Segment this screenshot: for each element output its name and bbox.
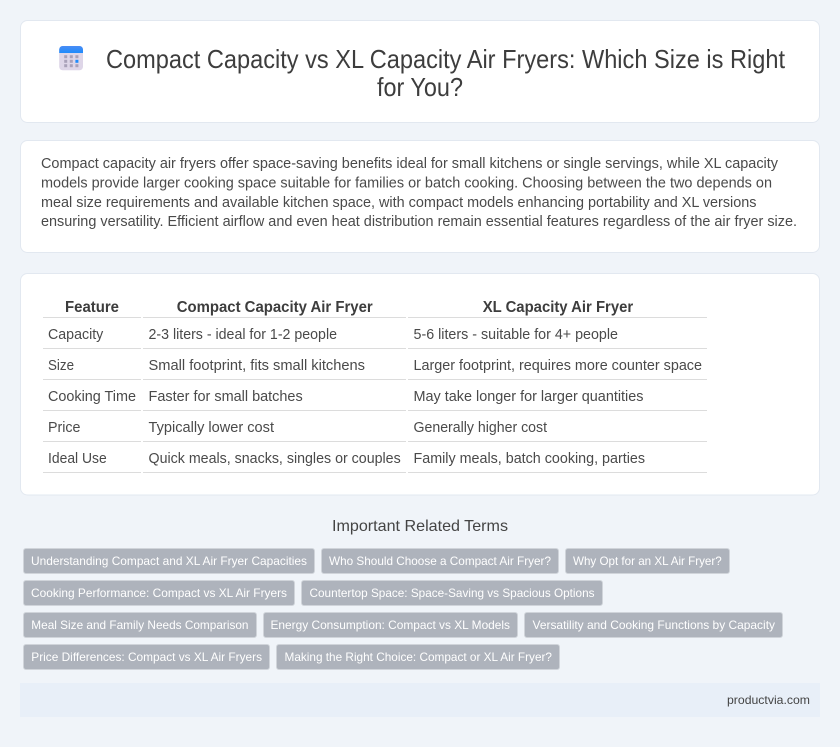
title: for You? <box>377 74 463 102</box>
row: capacity: 2-3 liters - ideal for 1-2 people <box>148 327 337 343</box>
tag <box>276 644 560 670</box>
tag: Who Should Choose a Compact Air Fryer? <box>329 554 551 568</box>
tag <box>264 612 518 638</box>
tag: Energy Consumption: Compact vs XL Models <box>270 618 510 632</box>
tag: Making the Right Choice: Compact or XL Air Fryer? <box>284 650 552 664</box>
tag <box>322 548 558 574</box>
row: ideal use: Family meals, batch cooking, parties <box>414 451 645 467</box>
tag <box>24 612 256 638</box>
tag: Countertop Space: Space-Saving vs Spacious Options <box>310 586 594 600</box>
row: size: Small footprint, fits small kitchens <box>148 358 365 374</box>
row: cooking time: Cooking Time <box>48 389 136 405</box>
table header <box>65 299 633 316</box>
tag: Versatility and Cooking Functions by Capacity <box>532 618 775 632</box>
footer <box>20 683 820 717</box>
row: size: Larger footprint, requires more counter space <box>414 358 702 374</box>
icon: calendar <box>59 46 83 70</box>
row: cooking time: Faster for small batches <box>148 389 303 405</box>
summary text: models provide larger cooking space suitable for families or batch cooking. Choosing between the two depends on <box>41 176 772 192</box>
tag: Understanding Compact and XL Air Fryer Capacities <box>31 554 307 568</box>
row: capacity: 5-6 liters - suitable for 4+ people <box>414 327 618 343</box>
summary text: meal size requirements and available kitchen space, with compact models enhancing portability and XL versions <box>41 195 756 211</box>
row: ideal use: Ideal Use <box>48 451 107 467</box>
tag <box>24 548 314 574</box>
row: ideal use: Quick meals, snacks, singles or couples <box>148 451 401 467</box>
tag: Cooking Performance: Compact vs XL Air Fryers <box>31 586 287 600</box>
row: price <box>48 420 547 436</box>
table header: XL Capacity Air Fryer <box>483 299 633 316</box>
tag <box>524 612 782 638</box>
tag <box>24 644 270 670</box>
tag <box>302 580 602 606</box>
tag <box>24 580 294 606</box>
footer: productvia.com <box>727 693 810 707</box>
row: cooking time <box>48 389 644 405</box>
panel: title card <box>20 20 820 122</box>
tag <box>566 548 730 574</box>
tag: Price Differences: Compact vs XL Air Fryers <box>31 650 262 664</box>
row: capacity <box>48 327 618 343</box>
summary text <box>41 156 797 230</box>
tag: Meal Size and Family Needs Comparison <box>31 618 248 632</box>
row: size: Size <box>48 358 74 374</box>
row: price: Price <box>48 420 80 436</box>
summary text: Compact capacity air fryers offer space-saving benefits ideal for small kitchens or single servings, while XL capacity <box>41 156 779 172</box>
tag: Why Opt for an XL Air Fryer? <box>573 554 722 568</box>
panel: comparison table <box>20 274 820 495</box>
row: capacity: Capacity <box>48 327 104 343</box>
panel: summary <box>20 140 820 252</box>
title: Compact Capacity vs XL Capacity Air Fryers: Which Size is Right <box>106 46 785 74</box>
row: price: Typically lower cost <box>148 420 274 436</box>
row: ideal use <box>48 451 645 467</box>
row: cooking time: May take longer for larger quantities <box>414 389 644 405</box>
table header: Feature <box>65 299 119 316</box>
heading: related terms: Important Related Terms <box>332 518 508 535</box>
row: price: Generally higher cost <box>414 420 547 436</box>
row: size <box>48 358 702 374</box>
related term tags <box>24 548 782 670</box>
summary text: ensuring versatility. Efficient airflow and even heat distribution remain essential features regardless of the air fryer size. <box>41 214 797 230</box>
table header: Compact Capacity Air Fryer <box>177 299 373 316</box>
title <box>106 46 785 102</box>
